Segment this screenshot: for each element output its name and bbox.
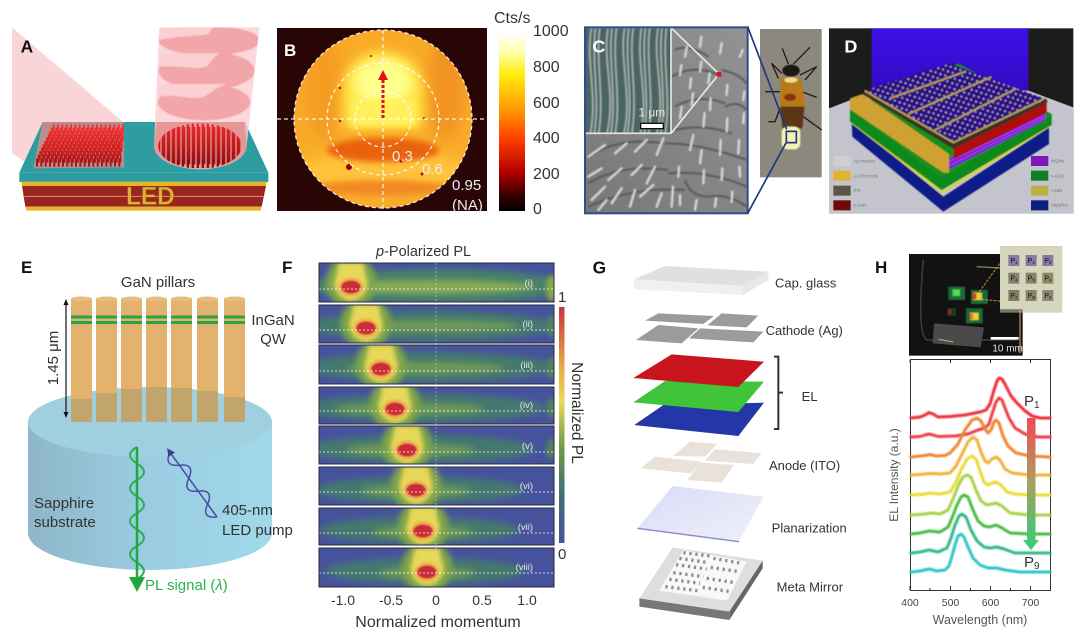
red EL layer — [633, 354, 764, 387]
InGaN QW label: InGaN — [251, 312, 295, 329]
panel A: LED with beam steering — [12, 26, 268, 211]
green EL layer — [633, 381, 764, 412]
label C: C — [592, 37, 605, 57]
NA labels — [392, 148, 483, 214]
LED pump wave arrow — [161, 444, 223, 521]
x tick labels: 0.5 — [472, 592, 492, 608]
pixel inset: 1 — [1015, 260, 1018, 265]
colour bar labels — [558, 289, 566, 563]
legend right: MQWs — [1051, 159, 1064, 164]
legend right — [1031, 156, 1069, 210]
scale bar 1 um: 1 μm — [638, 106, 665, 120]
label H: H — [875, 258, 887, 277]
heading: p-Polarized PL — [375, 244, 471, 260]
sapphire substrate label: substrate — [34, 514, 96, 531]
x tick labels: -1.0 — [331, 592, 355, 608]
anode — [641, 442, 762, 483]
firefly photo — [760, 29, 822, 177]
layer labels: Planarization — [772, 520, 847, 535]
label G: G — [593, 257, 606, 277]
wavelength ticks: 500 — [942, 597, 959, 609]
sapphire substrate label: Sapphire — [34, 495, 94, 512]
ITO — [864, 93, 1047, 146]
x tick labels: -0.5 — [379, 592, 403, 608]
row iv — [320, 388, 554, 424]
colour bar labels: 400 — [533, 130, 560, 147]
callout lines — [979, 254, 1008, 302]
sapphire top surface — [28, 387, 272, 457]
layer labels: Anode (ITO) — [769, 458, 840, 473]
sapphire side — [28, 422, 272, 570]
row labels — [516, 278, 533, 573]
pixel inset: 5 — [1032, 278, 1035, 283]
cathode — [636, 313, 763, 343]
pillars above surface — [71, 296, 245, 399]
height arrow — [64, 299, 68, 418]
colour bar labels: 200 — [533, 166, 560, 183]
pixel inset: 4 — [1015, 278, 1018, 283]
colour bar labels: 1 — [558, 289, 566, 306]
wavelength ticks — [901, 597, 1039, 609]
scale text: 10 mm — [992, 344, 1023, 355]
row labels: (iii) — [520, 360, 533, 371]
n-GaN — [850, 63, 1052, 177]
map background — [277, 28, 487, 211]
x axis title: Wavelength (nm) — [933, 613, 1027, 627]
pixel inset: P — [1044, 276, 1049, 283]
blue EL layer — [634, 403, 764, 436]
NA labels: (NA) — [452, 197, 483, 214]
left metasurface pillars — [33, 122, 124, 168]
row vii — [320, 508, 554, 544]
label A: A — [21, 37, 34, 57]
x tick labels: 1.0 — [517, 592, 537, 608]
legend left: Au Electrode — [853, 173, 879, 178]
right metasurface pillars — [157, 127, 243, 164]
SEM scales — [588, 48, 747, 207]
x tick labels — [331, 592, 537, 608]
wavelength ticks: 400 — [901, 597, 919, 609]
NA labels: 0.95 — [452, 177, 481, 194]
sapphire — [852, 122, 1049, 212]
pixel inset: 8 — [1032, 295, 1035, 300]
blue emission — [872, 28, 1028, 108]
scale bar 1 um — [638, 106, 665, 129]
pixel inset: 3 — [1049, 260, 1052, 265]
row labels: (i) — [525, 278, 533, 289]
pixel inset: P — [1010, 293, 1015, 300]
pixel inset: P — [1044, 258, 1049, 265]
height label: 1.45 μm — [45, 331, 62, 385]
pixel inset: 6 — [1049, 278, 1052, 283]
colour bar — [559, 307, 564, 543]
spiral wavefront — [158, 26, 260, 120]
layer labels: Cathode (Ag) — [766, 323, 843, 338]
firefly legs and antennae — [765, 47, 822, 130]
row i — [320, 264, 554, 302]
scale bar — [991, 337, 1019, 340]
pixel inset: P — [1010, 276, 1015, 283]
map rings and crosshair — [277, 30, 487, 211]
colour bar title: Normalized PL — [568, 362, 585, 464]
legend right: n-GaN — [1051, 173, 1064, 178]
pixel inset: P — [1044, 293, 1049, 300]
PL signal wave arrow — [129, 447, 145, 592]
device layers — [850, 63, 1052, 212]
y axis title: EL Intensity (a.u.) — [887, 428, 901, 522]
x tick labels: 0 — [432, 592, 440, 608]
zoom source square and lines — [748, 27, 796, 213]
row labels: (ii) — [522, 319, 533, 330]
firefly body — [780, 65, 806, 149]
P1 label: 1 — [1034, 400, 1040, 411]
layer labels: Cap. glass — [775, 275, 837, 290]
deflected beam — [12, 27, 124, 168]
LED label: LED — [126, 182, 175, 210]
wavelength ticks: 700 — [1022, 597, 1039, 609]
P9 label: P — [1024, 554, 1034, 571]
colour bar — [499, 35, 525, 211]
PL signal label: PL signal (λ) — [145, 577, 228, 594]
label B: B — [284, 41, 296, 60]
row v — [320, 426, 554, 464]
SEM hairs — [588, 37, 744, 210]
legend left: ITO — [853, 188, 861, 193]
P9 label: 9 — [1034, 561, 1040, 572]
pixel inset: 7 — [1015, 295, 1018, 300]
meta mirror — [639, 547, 763, 620]
bracket — [774, 357, 783, 429]
pixel inset: P — [1010, 258, 1015, 265]
colour bar labels: 1000 — [533, 23, 569, 40]
row labels: (viii) — [516, 562, 533, 573]
row labels: (vi) — [520, 481, 533, 492]
InGaN QW label: QW — [260, 331, 287, 348]
spectra curves — [911, 378, 1050, 572]
spectra axes frame — [910, 360, 1050, 590]
pixel inset — [1000, 246, 1062, 313]
LED slab front layers — [19, 173, 268, 211]
colour bar labels: 600 — [533, 95, 560, 112]
pump label: LED pump — [222, 522, 293, 539]
row iii — [320, 346, 554, 384]
pixel inset: P — [1028, 293, 1032, 300]
wavelength ticks: 600 — [982, 597, 999, 609]
SEM frame — [585, 27, 748, 213]
panel F: p-polarized PL maps — [282, 244, 585, 631]
pillars inside substrate — [71, 387, 245, 422]
heading GaN pillars: GaN pillars — [121, 274, 195, 291]
map circle heat — [293, 30, 473, 208]
P1 label: P — [1024, 393, 1034, 410]
device photo — [909, 246, 1062, 356]
pump label — [222, 502, 293, 539]
dark backdrop — [829, 28, 1073, 213]
pump label: 405-nm — [222, 502, 273, 519]
row labels: (iv) — [520, 400, 533, 411]
vortex beam — [154, 27, 259, 169]
row vi — [320, 468, 554, 504]
SEM image — [585, 27, 748, 213]
row ii — [320, 306, 554, 342]
pixel inset: 2 — [1032, 260, 1035, 265]
legend left — [833, 156, 879, 210]
MQWs — [949, 112, 1046, 169]
pixel inset: P — [1028, 276, 1032, 283]
LED slab top — [19, 122, 268, 173]
panel G: OLED exploded stack — [593, 257, 847, 620]
NA labels: 0.3 — [392, 148, 413, 165]
zero momentum guide — [435, 263, 437, 587]
row labels: (v) — [522, 441, 533, 452]
panel D: LED device stack — [829, 28, 1073, 213]
InGaN QW label — [251, 312, 295, 348]
NA labels: 0.6 — [422, 161, 443, 178]
beam footprint on slab — [154, 122, 247, 169]
cap glass — [634, 266, 768, 295]
legend left: Ag clusters — [853, 159, 875, 164]
gold electrode — [850, 94, 949, 173]
Ag clusters top surface — [864, 63, 1047, 143]
label E: E — [21, 258, 32, 277]
legend left: p-GaN — [853, 203, 866, 208]
floor — [829, 91, 1073, 213]
gold grid — [864, 72, 1045, 143]
inset callout lines — [586, 28, 719, 133]
row frames — [319, 263, 554, 587]
row viii — [320, 548, 554, 586]
legend right: Sapphire — [1051, 203, 1069, 208]
i-GaN — [851, 122, 1049, 193]
label D: D — [844, 37, 857, 57]
dotted red arrow — [378, 70, 388, 118]
colour bar labels — [494, 10, 569, 218]
p-GaN — [953, 100, 1047, 159]
layer labels — [766, 275, 847, 594]
InGaN quantum well bands — [71, 317, 245, 322]
panel E: GaN pillars on sapphire — [21, 258, 295, 594]
panel B: emission map — [277, 10, 569, 218]
colour bar labels: Cts/s — [494, 10, 530, 27]
layer labels: EL — [802, 389, 818, 404]
x axis title: Normalized momentum — [355, 614, 521, 631]
panel H: EL spectra and device photo — [875, 246, 1062, 627]
layer labels: Meta Mirror — [777, 579, 844, 594]
red marker — [717, 72, 721, 77]
legend right: i-GaN — [1051, 188, 1062, 193]
pixel inset: P — [1028, 258, 1032, 265]
planarization — [637, 486, 763, 542]
colour bar labels: 0 — [558, 546, 566, 563]
colour bar labels: 0 — [533, 201, 542, 218]
row labels: (vii) — [518, 522, 533, 533]
sapphire substrate label — [34, 495, 96, 531]
pixel inset: 9 — [1049, 295, 1052, 300]
spectra gradient arrow — [1023, 418, 1039, 550]
colour bar labels: 800 — [533, 59, 560, 76]
label F: F — [282, 258, 292, 277]
panel C: firefly scales — [585, 27, 822, 213]
inset nanostructure — [586, 27, 671, 135]
